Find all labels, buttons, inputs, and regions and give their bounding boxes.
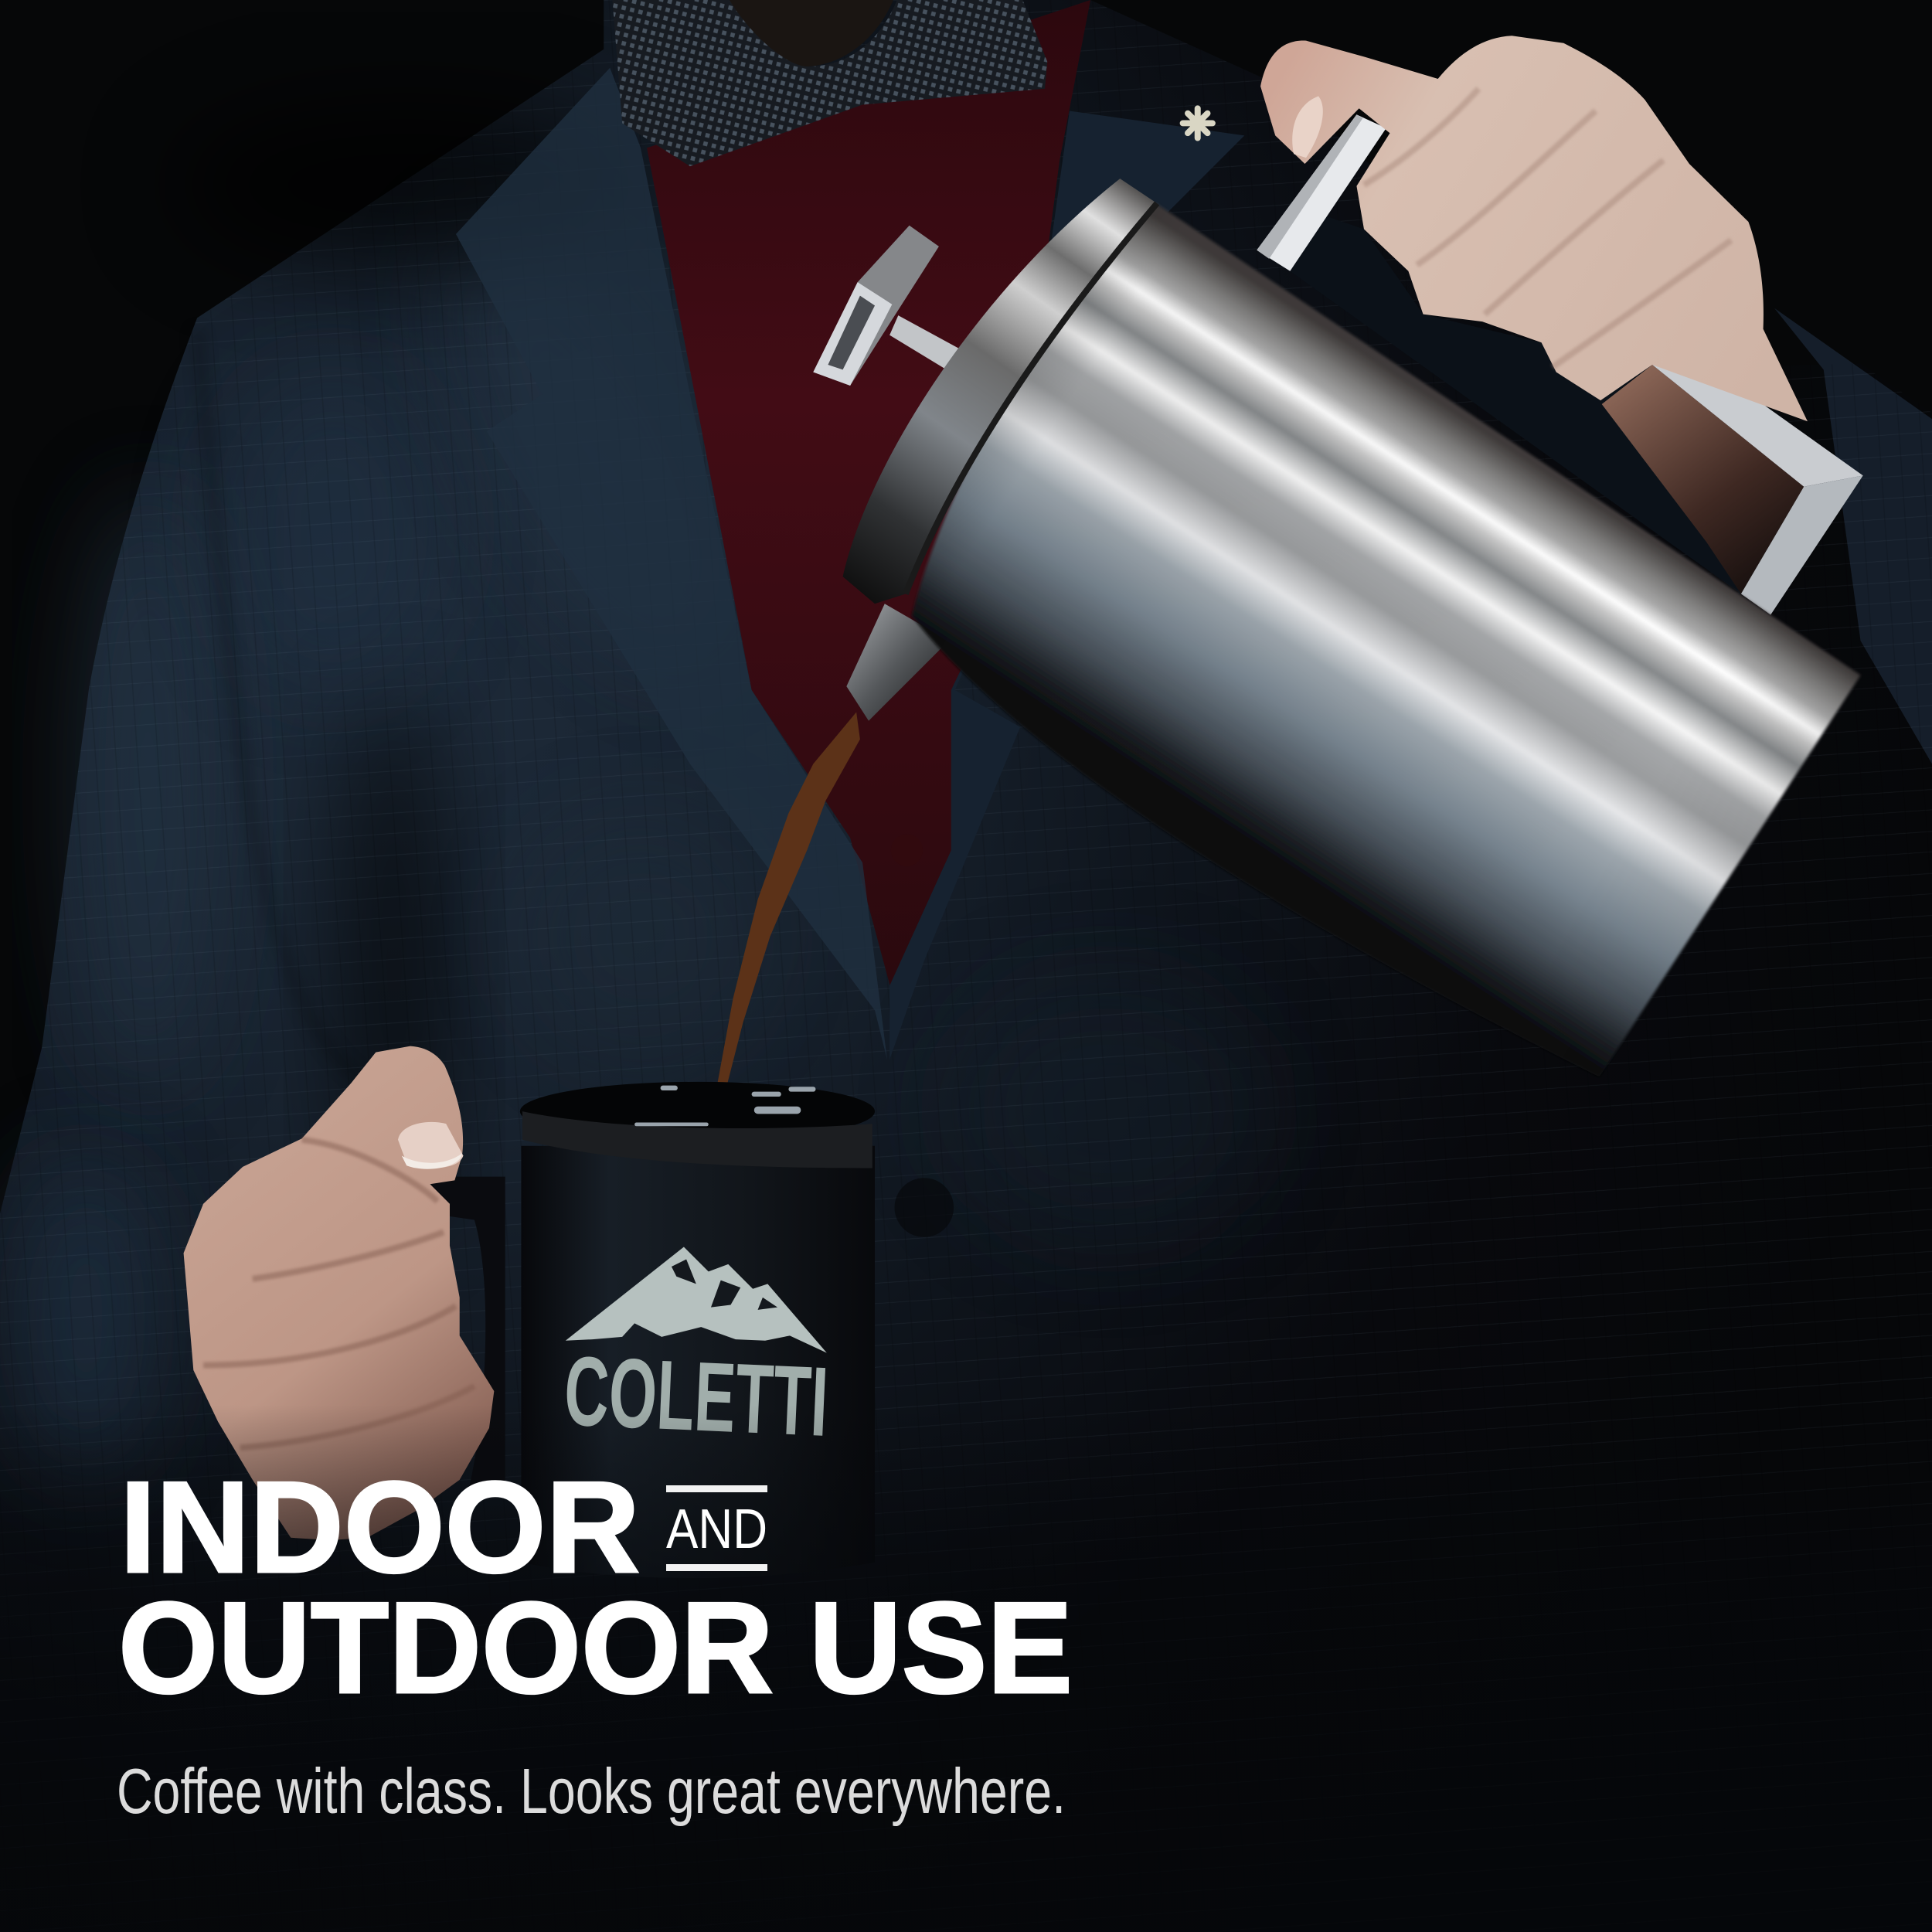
button and shirt detail bbox=[891, 834, 954, 1237]
headline line 1: INDOOR bbox=[120, 1454, 640, 1600]
thumbnail bbox=[398, 1122, 463, 1168]
right hand bbox=[1260, 36, 1808, 421]
AND badge bbox=[666, 1485, 767, 1571]
thumbnail bbox=[1292, 96, 1323, 158]
french press bbox=[813, 114, 1863, 1077]
left lapel bbox=[456, 68, 887, 1060]
coffee stream bbox=[711, 713, 860, 1119]
headline line 2: OUTDOOR USE bbox=[118, 1575, 1073, 1720]
mountain logo bbox=[566, 1247, 827, 1353]
pitcher body bbox=[912, 203, 1861, 1077]
mug handle bbox=[431, 1177, 505, 1491]
bottom dark fade bbox=[0, 1405, 1932, 1932]
bow tie bbox=[612, 0, 1047, 166]
pitcher spout bbox=[846, 604, 949, 721]
lapel pin bbox=[1183, 108, 1213, 138]
COLETTI wordmark: COLETTI bbox=[562, 1336, 830, 1458]
AND badge: AND bbox=[666, 1498, 767, 1560]
wrist bbox=[1602, 365, 1804, 594]
subtitle: Coffee with class. Looks great everywhere. bbox=[117, 1755, 1066, 1827]
right lapel bbox=[889, 111, 1244, 1060]
pitcher handle bbox=[1257, 114, 1863, 615]
mug bbox=[431, 1082, 875, 1578]
plunger rod bbox=[889, 315, 968, 377]
plunger knob bbox=[813, 226, 939, 386]
mug rim bbox=[522, 1111, 872, 1168]
beard bbox=[727, 0, 893, 66]
pitcher back shadow bbox=[1290, 209, 1804, 594]
shirt bbox=[647, 0, 1090, 998]
rim highlights bbox=[634, 1086, 815, 1126]
mug body bbox=[521, 1146, 875, 1578]
mug opening bbox=[520, 1082, 875, 1141]
pitcher lid bbox=[843, 179, 1157, 604]
left hand bbox=[184, 1046, 494, 1540]
headline bbox=[118, 1454, 1073, 1720]
